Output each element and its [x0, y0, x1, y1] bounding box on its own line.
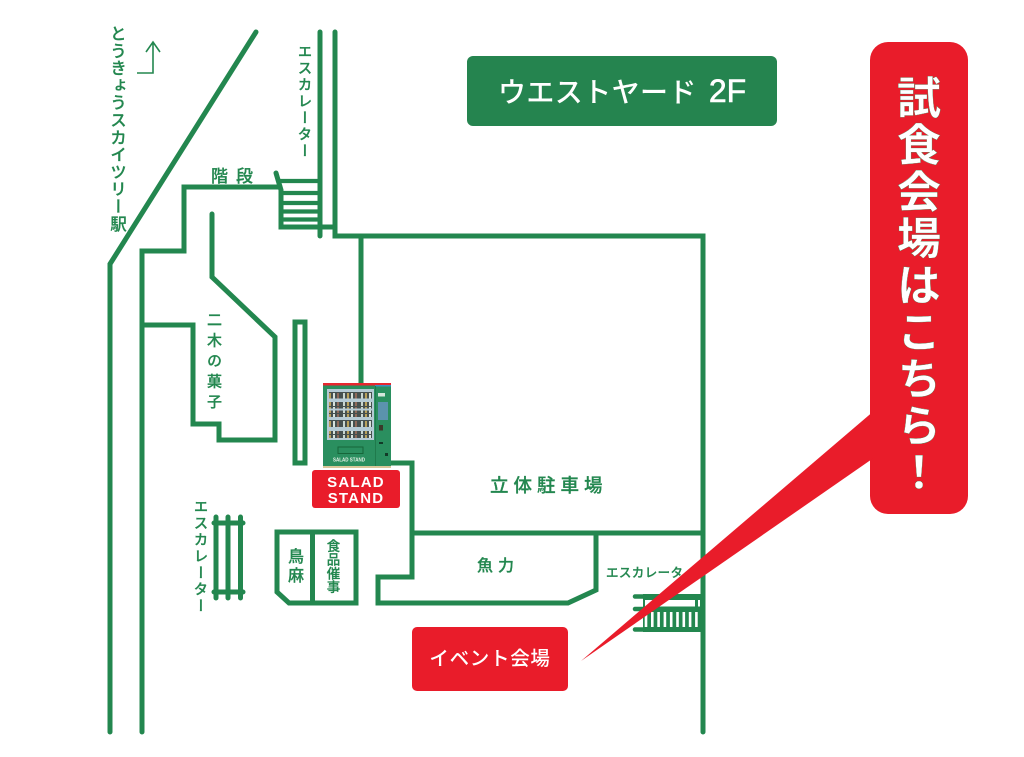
label: nagi no kashi: 二木の菓子	[205, 312, 222, 414]
label: stairs: 階段	[211, 167, 261, 186]
label: Tokyo Skytree station: とうきょうスカイツリー駅	[108, 25, 126, 233]
label: event venue	[412, 627, 568, 691]
north arrow	[137, 42, 160, 73]
label: event venue: イベント会場	[429, 648, 551, 670]
label: top escalator: エスカレーター	[296, 44, 312, 160]
label: parking: 立体駐車場	[490, 475, 608, 496]
label: salad stand: STAND	[328, 490, 384, 506]
parking wall	[358, 236, 364, 384]
top escalator and stairs	[276, 32, 703, 732]
label: left escalator: エスカレーター	[192, 499, 208, 614]
left escalator	[214, 517, 243, 598]
heading: west yard 2F: ウエストヤード 2F	[498, 73, 746, 109]
toriasa and food event shop	[277, 532, 356, 603]
label: salad stand	[312, 470, 400, 508]
heading: west yard 2F	[467, 56, 777, 126]
vending machine: SALAD STAND	[333, 458, 365, 464]
label: uoriki: 魚力	[477, 558, 519, 575]
label: toriasa: 鳥麻	[285, 548, 302, 586]
label: salad stand: SALAD	[327, 474, 385, 491]
fish shop and parking outline	[378, 463, 703, 603]
label: food event: 食品催事	[324, 539, 340, 594]
nagi no kashi shop outline	[142, 214, 275, 440]
label: lower right escalator: エスカレータ	[606, 566, 683, 580]
outer left walkway	[110, 32, 280, 732]
callout text: 試食会場はこちら！	[890, 75, 939, 496]
narrow column	[295, 322, 305, 463]
